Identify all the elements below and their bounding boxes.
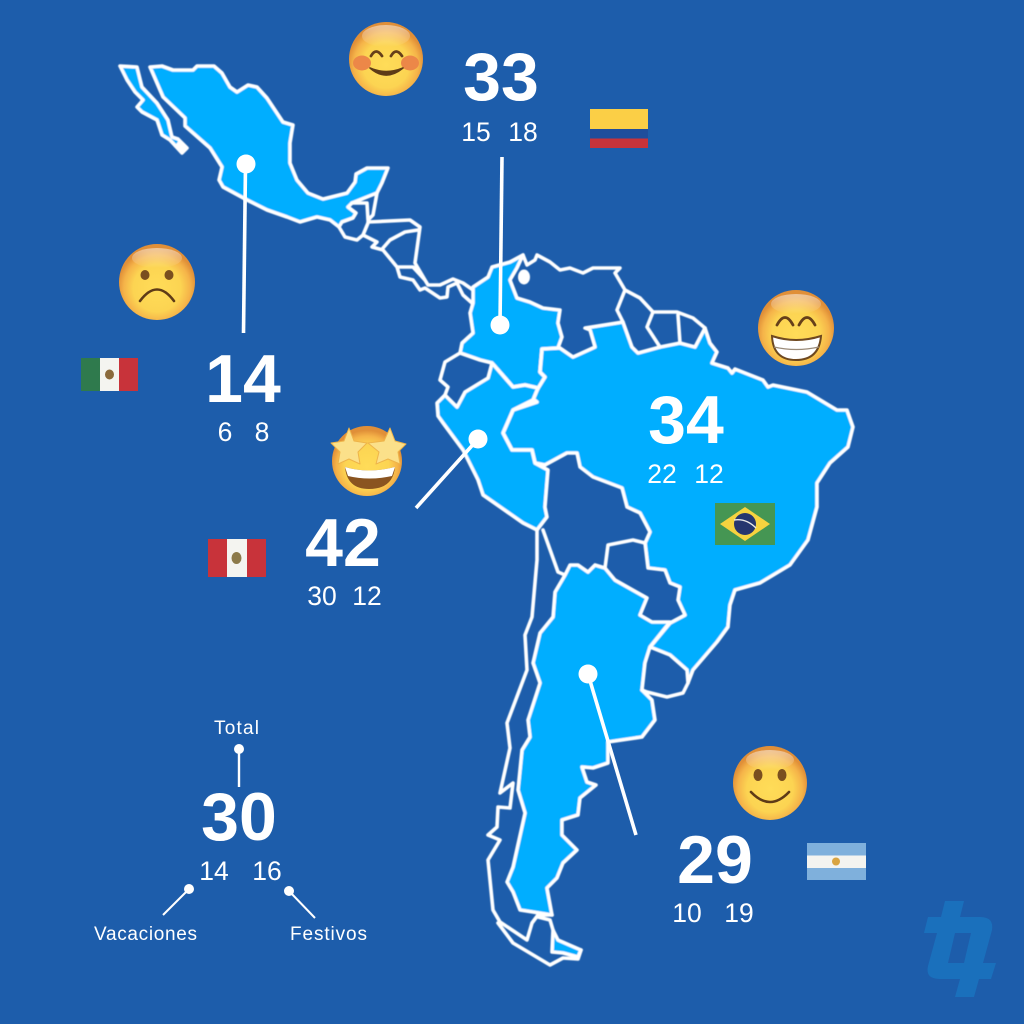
legend: example figures: 30	[201, 779, 277, 855]
data: Brazil: 12	[694, 459, 724, 489]
legend: festivos label: Festivos	[290, 924, 367, 945]
data: Colombia: 33	[463, 39, 539, 115]
borders: Paraguay and Uruguay	[605, 540, 688, 697]
data: Peru: 12	[352, 581, 382, 611]
country: Mexico mainland	[150, 66, 388, 227]
data: Colombia	[461, 39, 539, 147]
pointer: Peru	[416, 430, 488, 508]
data: Colombia: 18	[508, 117, 538, 147]
emoji: smiling with blush (Colombia)	[349, 22, 423, 96]
emoji: sad (Mexico)	[119, 244, 195, 320]
data: Argentina: 19	[724, 898, 754, 928]
data: Peru: 30	[307, 581, 337, 611]
legend: vacaciones pointer	[163, 884, 194, 915]
country: Peru	[437, 363, 548, 530]
Baja tip	[176, 144, 183, 150]
pointer: Mexico	[236, 154, 256, 333]
data: Mexico: 6	[218, 417, 232, 447]
legend: total label: Total	[214, 718, 259, 739]
legend: example figures	[199, 779, 282, 886]
legend: example figures: 14	[199, 856, 229, 886]
country: Tierra del Fuego tip	[552, 930, 581, 957]
legend	[94, 718, 367, 945]
borders: Central America	[339, 193, 473, 303]
data: Brazil: 22	[647, 459, 677, 489]
data: Brazil: 34	[648, 382, 724, 458]
data: Argentina	[672, 822, 754, 928]
data: Argentina: 10	[672, 898, 702, 928]
emoji: slight smile (Argentina)	[733, 746, 807, 820]
lake Maracaibo	[518, 270, 530, 284]
data: Mexico: 8	[255, 417, 269, 447]
borders: Venezuela and Guianas	[523, 255, 705, 347]
flag: Argentina	[807, 843, 866, 880]
borders: Chile	[488, 530, 581, 965]
flag: Colombia	[590, 109, 648, 148]
pointer: Argentina	[578, 664, 636, 835]
data: Mexico: 14	[205, 341, 281, 417]
logo	[924, 901, 996, 997]
country: Baja California	[120, 66, 187, 153]
legend: vacaciones label: Vacaciones	[94, 924, 197, 945]
country: Colombia	[460, 255, 562, 388]
data: Argentina: 29	[677, 822, 753, 898]
map: Latin America	[120, 66, 853, 965]
flag: Mexico	[81, 358, 138, 391]
country: Argentina	[507, 530, 670, 915]
borders: Ecuador	[440, 353, 460, 395]
legend: example figures: 16	[252, 856, 282, 886]
pointer: Colombia	[490, 157, 510, 334]
data: Colombia: 15	[461, 117, 491, 147]
emoji: grinning (Brazil)	[758, 290, 834, 366]
flag: Brazil	[715, 503, 775, 545]
emoji: star struck (Peru)	[331, 426, 406, 496]
flag: Peru	[208, 539, 266, 577]
legend: festivos pointer	[284, 886, 315, 918]
country: Brazil	[503, 322, 853, 683]
data: Peru: 42	[305, 505, 381, 581]
legend: total pointer	[234, 744, 244, 787]
